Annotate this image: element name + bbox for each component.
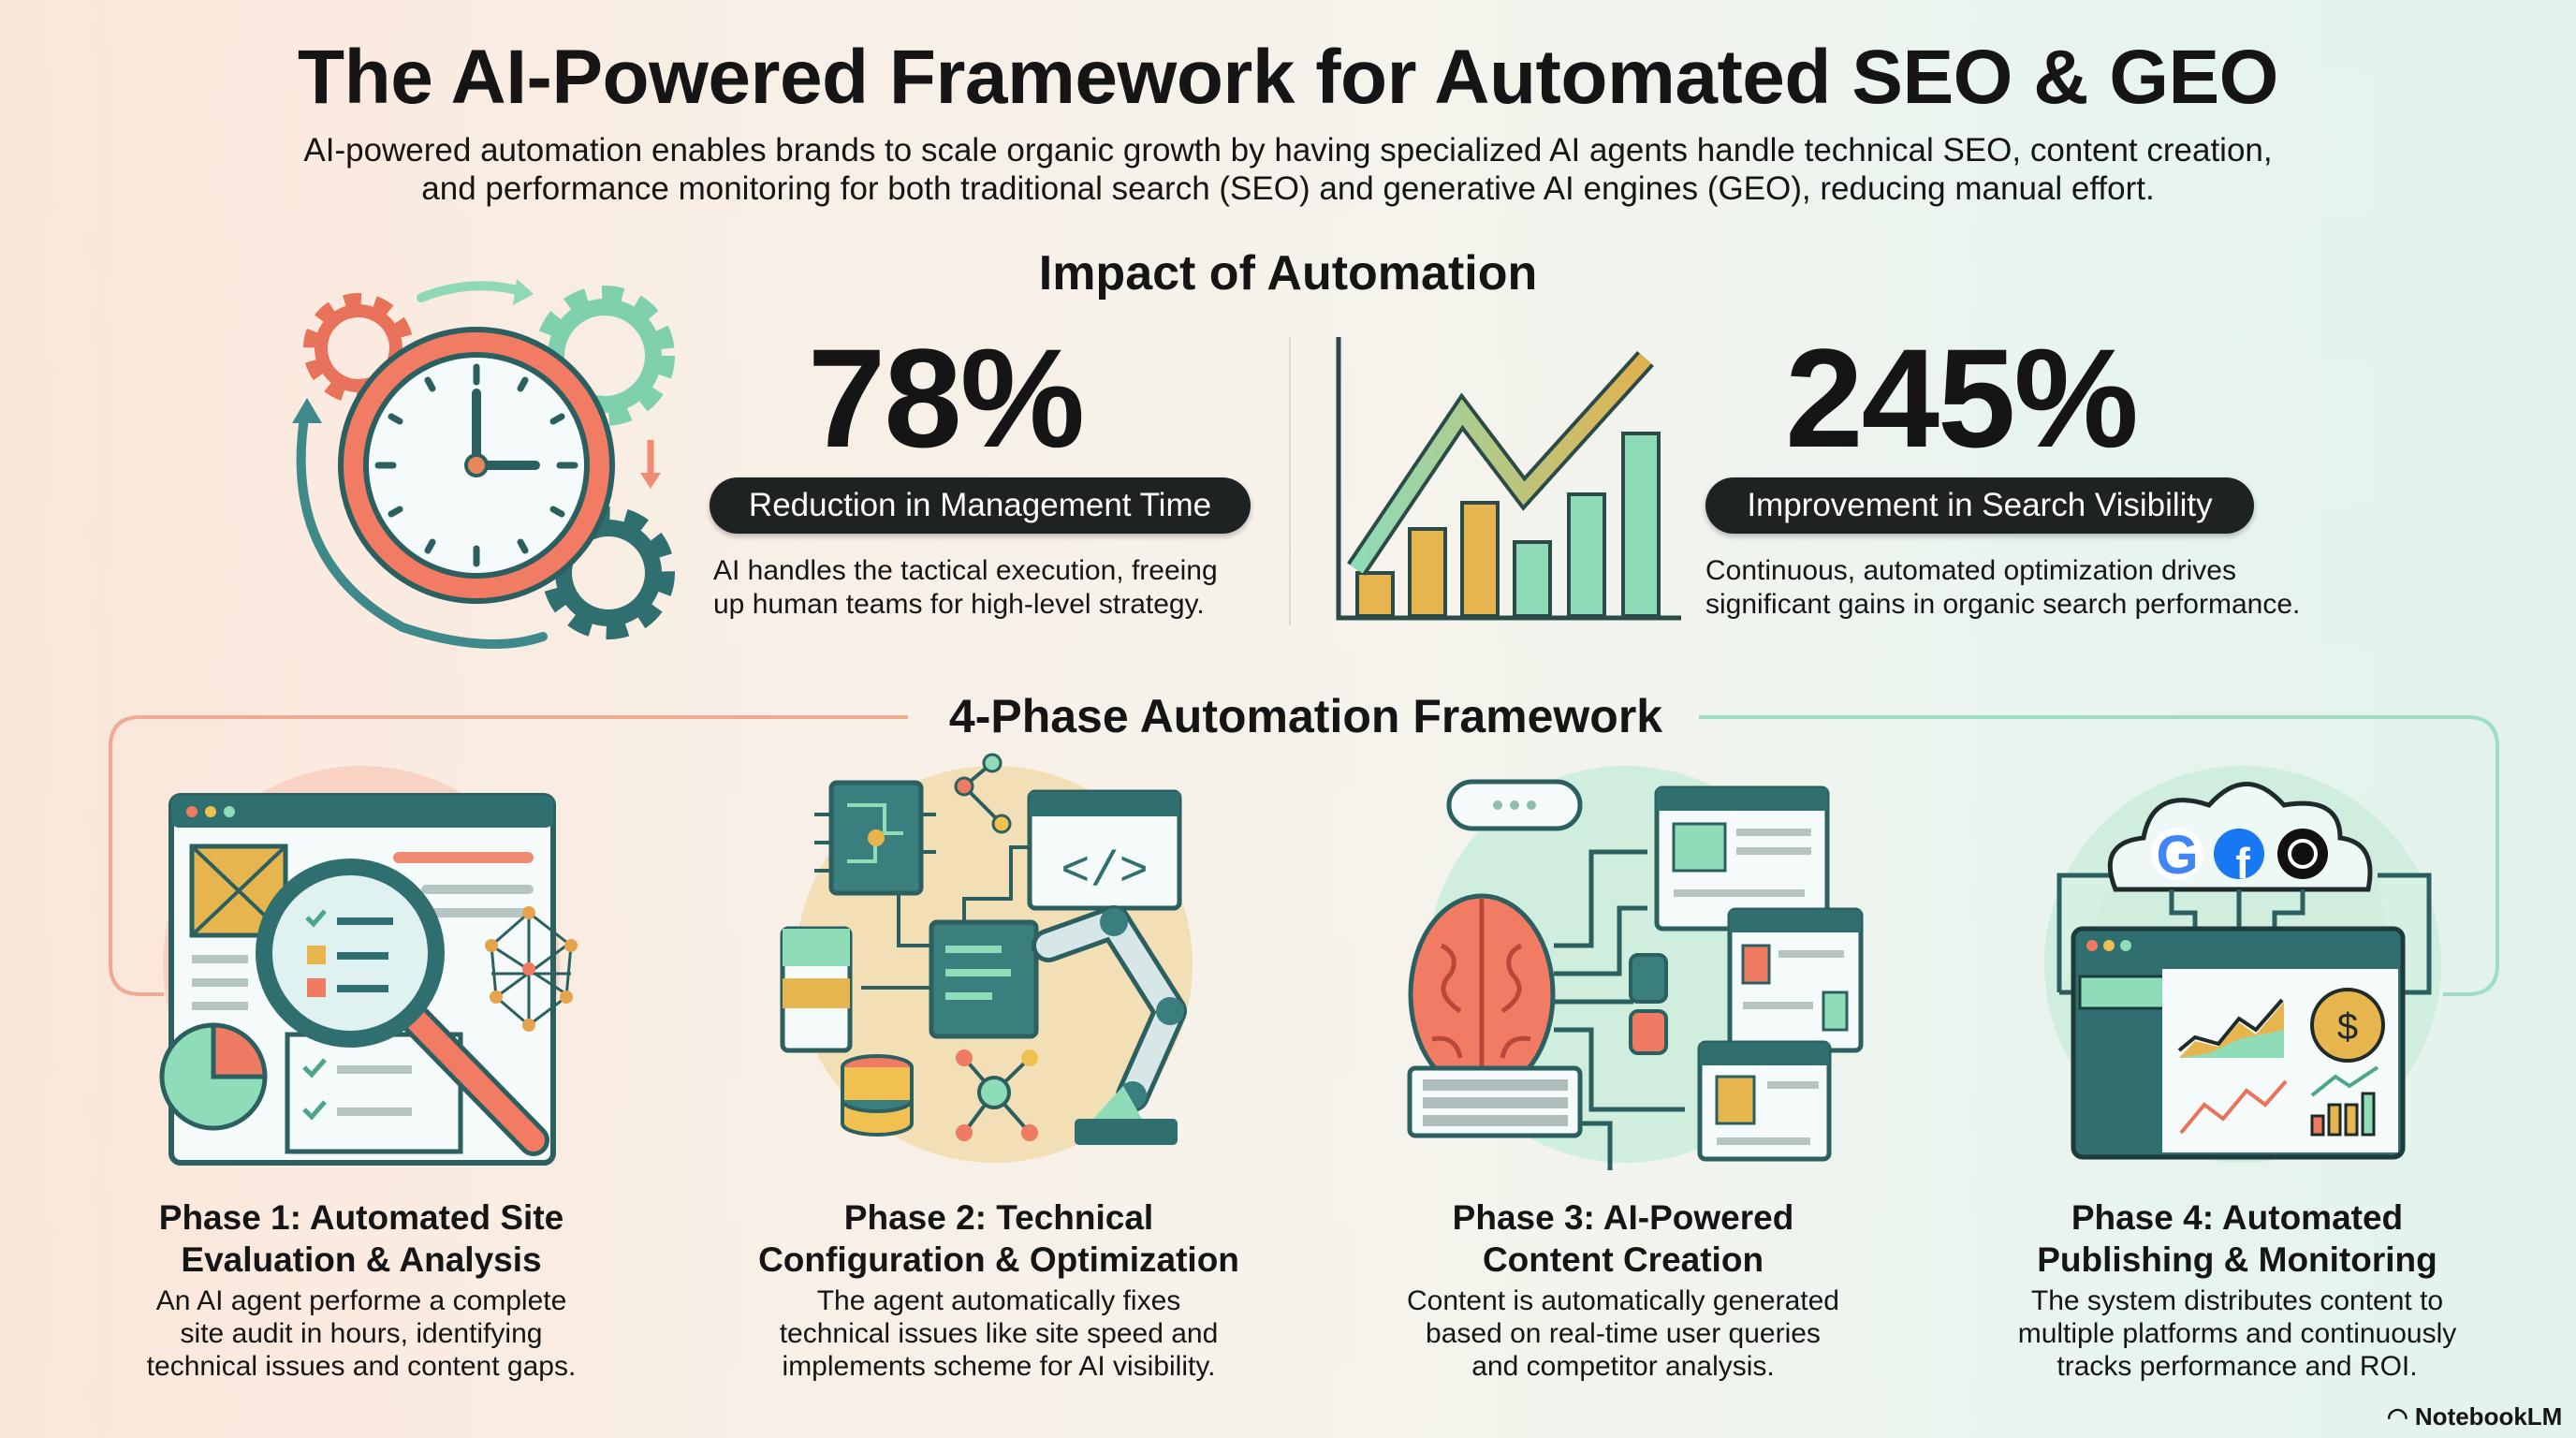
phase 3 text: Content is automatically generated (1407, 1285, 1839, 1316)
phase 1 text: Evaluation & Analysis (181, 1240, 542, 1279)
text: 245% description: significant gains in organic search performance. (1705, 589, 2300, 620)
illustration: phase 4 (2044, 766, 2441, 1163)
illustration: phase 4: $ (2337, 1006, 2358, 1048)
phase 3 text: based on real-time user queries (1426, 1318, 1821, 1349)
stat: 245%: 245% (1785, 319, 2137, 477)
stat: 78%: 78% (808, 319, 1083, 477)
subtitle: AI-powered automation enables brands to scale organic growth by having specialized AI agents handle technical SEO, content creation, (303, 132, 2273, 169)
text: 78% description (713, 555, 1218, 620)
bracket: framework outline (109, 715, 2499, 996)
icon: clock with gears (292, 279, 675, 649)
illustration: phase 2 (781, 753, 1193, 1163)
phase 4 text: Phase 4: Automated (2071, 1198, 2403, 1237)
phase 2 text (758, 1198, 1239, 1382)
pill: improvement in search visibility: Improvement in Search Visibility (1747, 487, 2213, 523)
phase 1 text: technical issues and content gaps. (147, 1351, 576, 1382)
divider (1289, 337, 1291, 625)
text: 245% description (1705, 555, 2300, 620)
pill: improvement in search visibility (1705, 477, 2254, 534)
phase 1 text (147, 1198, 576, 1382)
subtitle: and performance monitoring for both traditional search (SEO) and generative AI engines (GEO), reducing manual effort. (421, 170, 2155, 207)
phase 1 text: An AI agent performe a complete (156, 1285, 566, 1316)
bar chart (1337, 337, 1681, 620)
phase 2 text: The agent automatically fixes (817, 1285, 1180, 1316)
phase 2 text: Configuration & Optimization (758, 1240, 1239, 1279)
pill: reduction in management time: Reduction in Management Time (749, 487, 1211, 523)
logo: NotebookLM: ◠ NotebookLM (2387, 1402, 2562, 1431)
phase 4 text: tracks performance and ROI. (2056, 1351, 2418, 1382)
subtitle (303, 132, 2273, 207)
phase 4 text (2018, 1198, 2456, 1382)
phase 4 text: Publishing & Monitoring (2037, 1240, 2437, 1279)
text: 78% description: up human teams for high-level strategy. (713, 589, 1205, 620)
illustration: phase 4: G (2156, 825, 2199, 886)
heading: 4-phase framework: 4-Phase Automation Framework (949, 690, 1662, 742)
phase 2 text: technical issues like site speed and (780, 1318, 1218, 1349)
illustration: phase 1 (159, 766, 578, 1166)
pill: reduction in management time (710, 477, 1251, 534)
illustration: phase 3 (1408, 766, 1863, 1170)
text: 245% description: Continuous, automated optimization drives (1705, 555, 2236, 586)
phase 4 text: The system distributes content to (2031, 1285, 2443, 1316)
title: The AI-Powered Framework for Automated SEO & GEO (298, 35, 2278, 120)
illustration: phase 4: f (2235, 839, 2250, 888)
phase 4 text: multiple platforms and continuously (2018, 1318, 2456, 1349)
phase 3 text (1407, 1198, 1839, 1382)
heading: impact of automation: Impact of Automation (1039, 246, 1537, 301)
text: 78% description: AI handles the tactical execution, freeing (713, 555, 1218, 586)
illustration: phase 2: </> (1061, 844, 1149, 900)
phase 2 text: Phase 2: Technical (844, 1198, 1153, 1237)
phase 1 text: Phase 1: Automated Site (159, 1198, 564, 1237)
phase 3 text: Phase 3: AI-Powered (1453, 1198, 1793, 1237)
phase 3 text: and competitor analysis. (1471, 1351, 1775, 1382)
phase 2 text: implements scheme for AI visibility. (783, 1351, 1215, 1382)
phase 1 text: site audit in hours, identifying (181, 1318, 542, 1349)
phase 3 text: Content Creation (1483, 1240, 1764, 1279)
